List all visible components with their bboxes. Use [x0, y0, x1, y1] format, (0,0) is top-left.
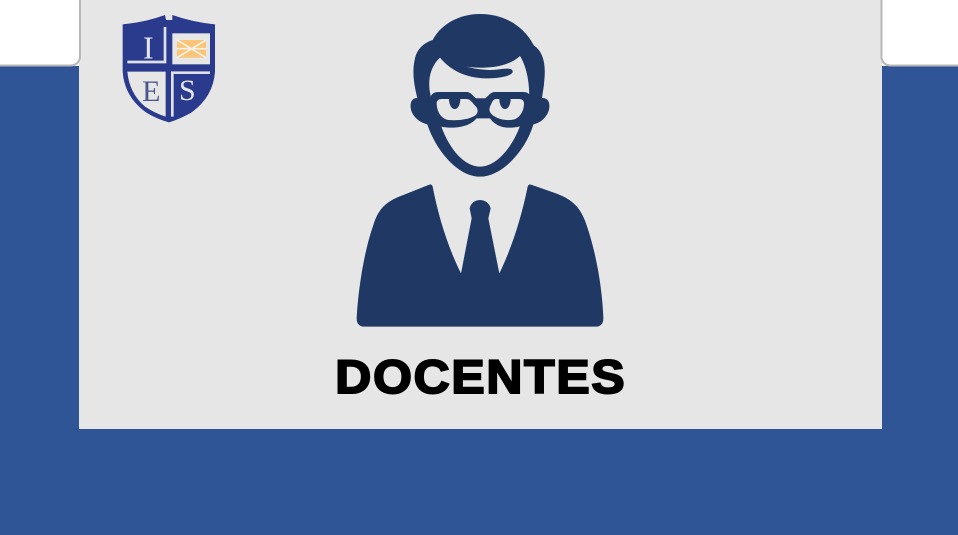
- logo: IES shield: [123, 15, 215, 122]
- top notch outlines: [0, 0, 958, 66]
- icon: orange crossed envelope: [177, 40, 206, 58]
- right pupil: [499, 99, 511, 109]
- letter S: S: [179, 74, 196, 107]
- shield shape: [123, 15, 215, 122]
- left lens: [437, 99, 478, 120]
- panel: docentes card: [79, 0, 882, 429]
- title: DOCENTES: DOCENTES: [335, 351, 625, 404]
- letter I: I: [143, 29, 154, 65]
- glasses frame: [431, 92, 531, 128]
- teacher suit and tie: [357, 185, 603, 327]
- right lens: [489, 99, 524, 120]
- hair and head silhouette: [411, 14, 549, 177]
- icon: teacher: [357, 14, 603, 327]
- lower face opening: [439, 118, 523, 167]
- quadrant rules: [127, 27, 210, 117]
- left pupil: [449, 99, 460, 109]
- quadrant: flag field: [172, 33, 210, 64]
- quadrant: letter E field: [127, 72, 166, 117]
- letter E: E: [142, 75, 160, 108]
- upper face opening: [429, 56, 529, 98]
- teacher head: [411, 14, 549, 177]
